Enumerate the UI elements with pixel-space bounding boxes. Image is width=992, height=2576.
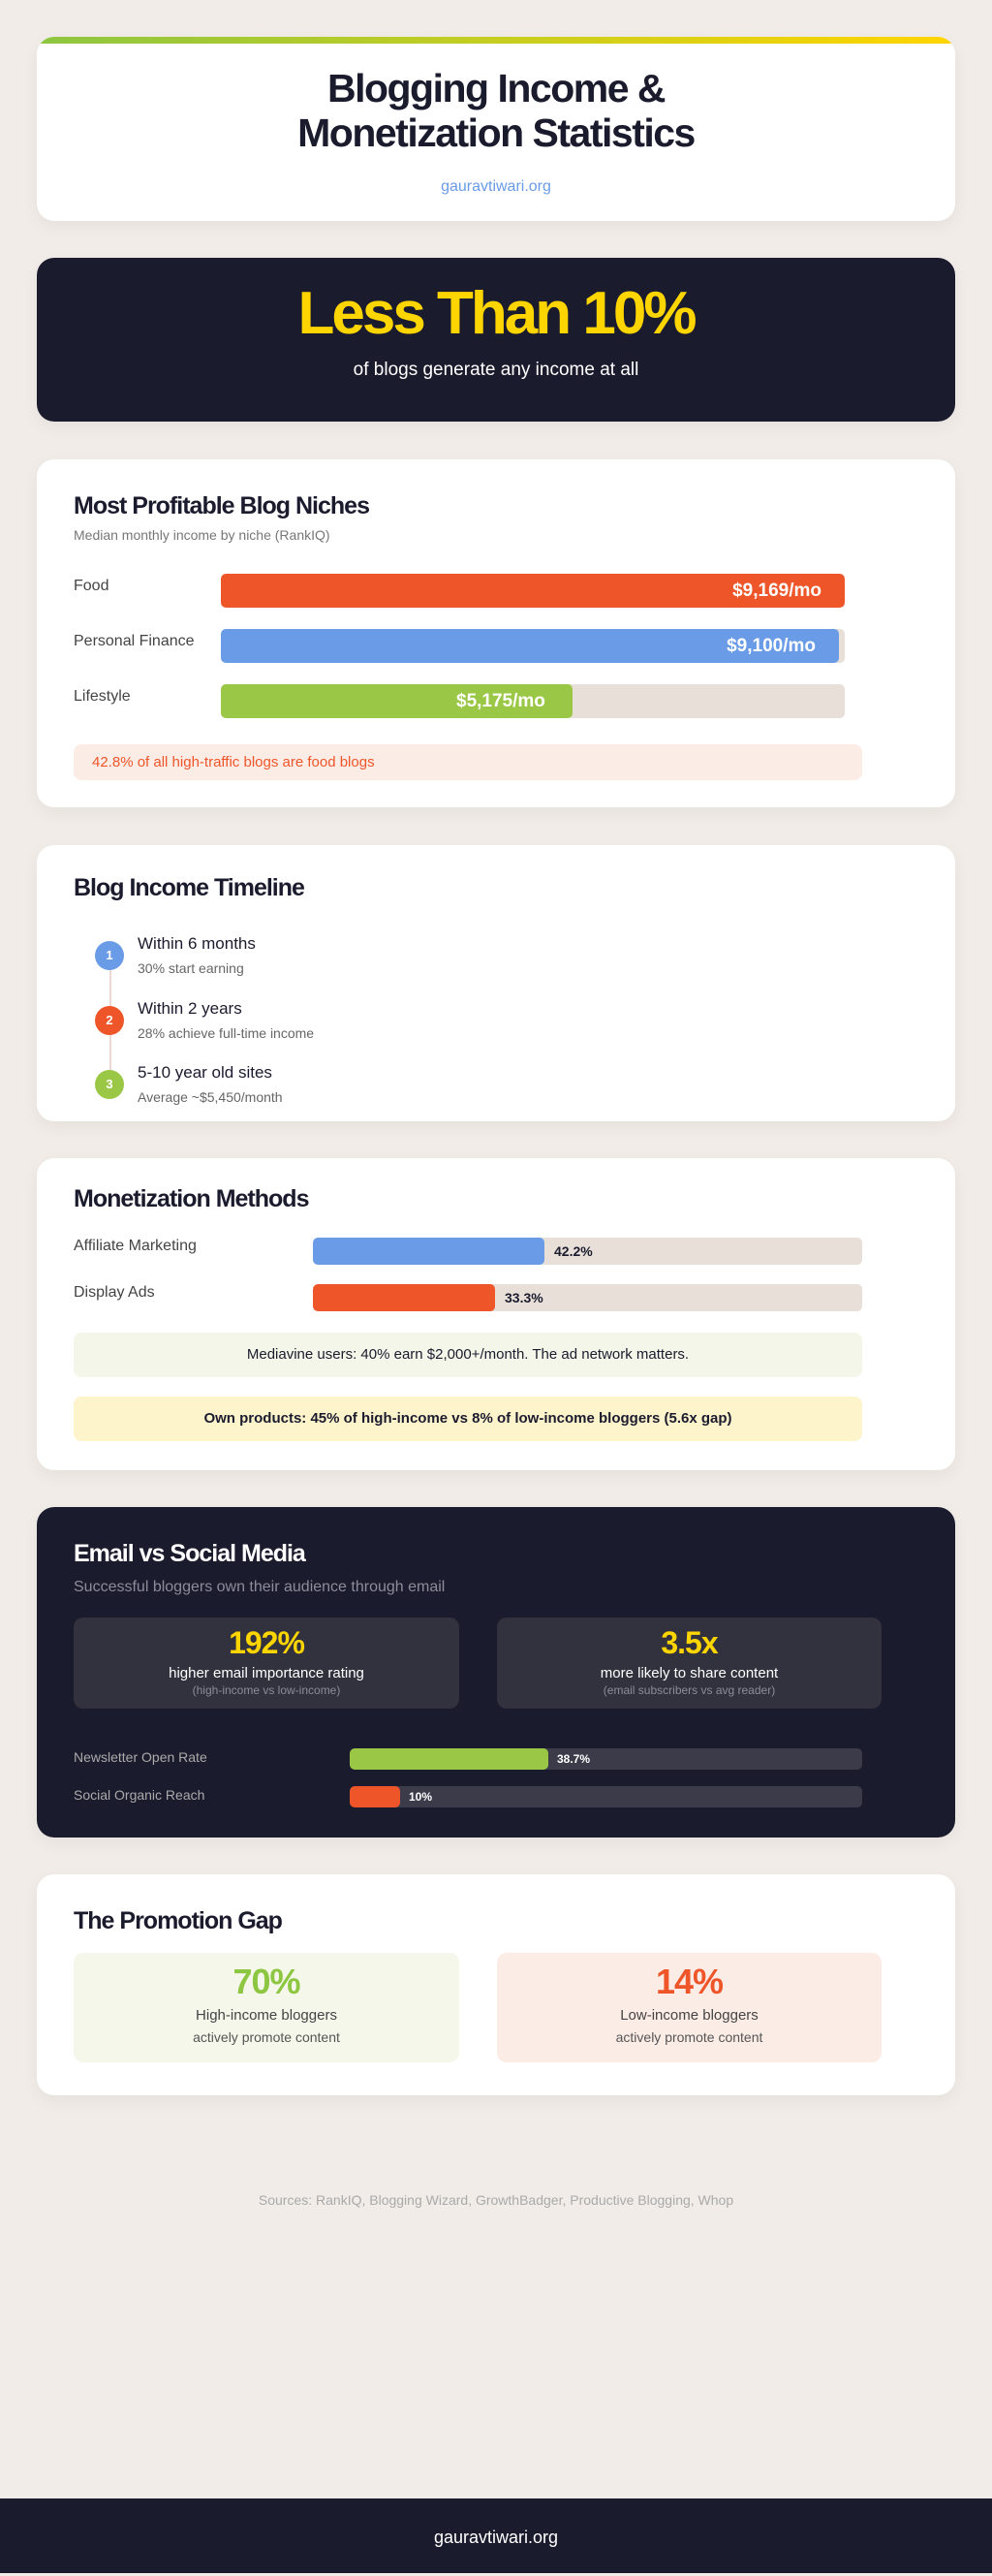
panel: monetization: Display Ads	[74, 1284, 155, 1301]
step 3: Average ~$5,450/month	[138, 1089, 283, 1105]
step 1: 1	[106, 948, 113, 962]
stat: 3.5x: 3.5x	[661, 1625, 718, 1660]
step 3: 3	[106, 1077, 113, 1091]
panel: promotion gap: The Promotion Gap	[74, 1907, 282, 1934]
panel: timeline: Blog Income Timeline	[74, 874, 304, 901]
step 2: 2	[106, 1013, 113, 1027]
panel: niches: Personal Finance	[74, 633, 195, 649]
stat: 192%: higher email importance rating	[169, 1665, 364, 1681]
stat: 14%: Low-income bloggers	[620, 2007, 759, 2024]
panel: monetization: Monetization Methods	[74, 1185, 308, 1212]
stat: 3.5x	[497, 1618, 882, 1709]
step 2: Within 2 years	[138, 999, 242, 1018]
bar chart: methods	[313, 1238, 862, 1311]
panel: niches: Lifestyle	[74, 688, 131, 705]
callout: mediavine: Mediavine users: 40% earn $2,000+/month. The ad network matters.	[247, 1346, 689, 1363]
panel: timeline	[37, 845, 955, 1121]
sources: Sources: RankIQ, Blogging Wizard, GrowthBadger, Productive Blogging, Whop	[259, 2192, 733, 2208]
panel: promotion gap	[37, 1874, 955, 2095]
hero stat: of blogs generate any income at all	[354, 360, 638, 380]
heading: Most Profitable Blog Niches	[74, 492, 369, 519]
stat: 192%	[74, 1618, 459, 1709]
callout: 42.8% of all high-traffic blogs are food blogs	[92, 754, 375, 770]
step 2	[95, 999, 314, 1041]
step 1	[95, 934, 256, 976]
panel: email vs social: Successful bloggers own their audience through email	[74, 1579, 445, 1595]
panel: monetization: Affiliate Marketing	[74, 1238, 197, 1254]
panel: niches	[37, 459, 955, 807]
bar chart: niches: $9,100/mo	[727, 636, 816, 656]
panel: email vs social	[37, 1507, 955, 1838]
url: gauravtiwari.org	[441, 178, 551, 195]
panel: niches: Food	[74, 578, 108, 594]
bar chart: niches	[221, 574, 845, 718]
step 1: Within 6 months	[138, 934, 256, 953]
bar chart: methods: 33.3%	[505, 1290, 543, 1305]
bar chart: email vs social	[350, 1748, 862, 1807]
stat: 70%: High-income bloggers	[196, 2007, 337, 2024]
bar chart: email vs social: 38.7%	[557, 1752, 590, 1766]
callout: own products: Own products: 45% of high-income vs 8% of low-income bloggers (5.6x gap)	[203, 1410, 732, 1427]
panel: monetization	[37, 1158, 955, 1470]
bar chart: niches: $5,175/mo	[456, 691, 545, 711]
step 3: 5-10 year old sites	[138, 1063, 272, 1082]
bar chart: email vs social: 10%	[409, 1790, 432, 1804]
callout	[74, 744, 862, 780]
footer: gauravtiwari.org	[434, 2528, 558, 2547]
stat: 14%: 14%	[656, 1962, 723, 2001]
stat: 70%	[74, 1953, 459, 2062]
callout: mediavine	[74, 1333, 862, 1377]
stat: 70%: 70%	[232, 1962, 300, 2001]
bar chart: niches: $9,169/mo	[732, 581, 822, 601]
panel: email vs social: Newsletter Open Rate	[74, 1749, 207, 1765]
step 2: 28% achieve full-time income	[138, 1025, 314, 1041]
stat: 3.5x: more likely to share content	[601, 1665, 778, 1681]
hero stat	[37, 258, 955, 422]
header card	[37, 37, 955, 221]
panel: email vs social: Email vs Social Media	[74, 1540, 305, 1567]
bar chart: methods: 42.2%	[554, 1243, 593, 1259]
step 3	[95, 1063, 283, 1105]
callout: own products	[74, 1397, 862, 1441]
stat: 192%: 192%	[229, 1625, 304, 1660]
footer	[0, 2498, 992, 2573]
title	[297, 66, 695, 155]
stat: 3.5x: (email subscribers vs avg reader)	[604, 1683, 775, 1697]
panel: email vs social: Social Organic Reach	[74, 1787, 204, 1803]
stat: 70%: actively promote content	[193, 2029, 340, 2045]
title: Blogging Income &	[327, 66, 665, 110]
panel: niches: Median monthly income by niche (RankIQ)	[74, 527, 330, 543]
step 1: 30% start earning	[138, 960, 244, 976]
stat: 14%: actively promote content	[616, 2029, 762, 2045]
title: Monetization Statistics	[297, 110, 695, 155]
stat: 14%	[497, 1953, 882, 2062]
stat: 192%: (high-income vs low-income)	[193, 1683, 340, 1697]
hero stat: Less Than 10%	[298, 280, 694, 347]
